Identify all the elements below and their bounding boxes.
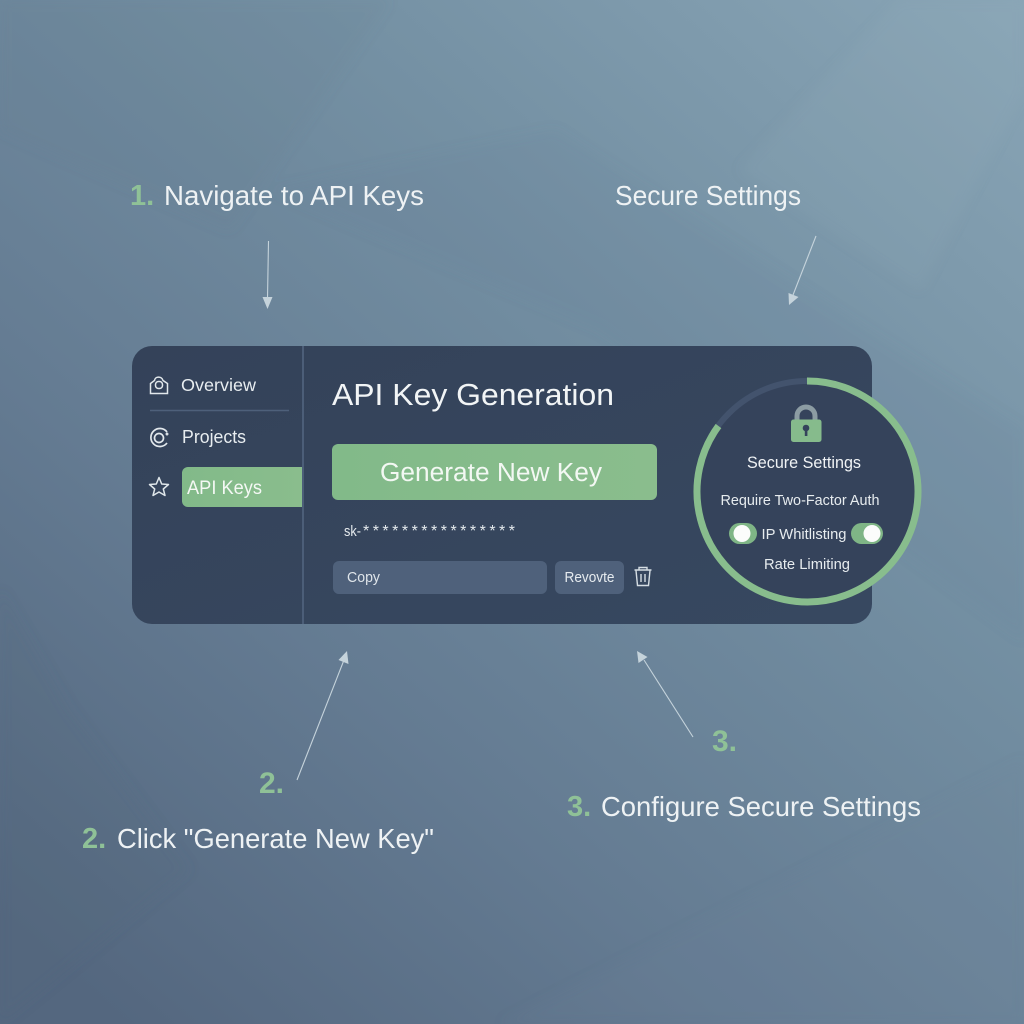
- step 2 heading: Click Generate New Key: 2.: [82, 823, 106, 855]
- step 3 heading: Configure Secure Settings: Configure Secure Settings: [601, 791, 921, 822]
- progress ring: [697, 381, 918, 602]
- button: Generate New Key: [332, 444, 657, 500]
- arrow: step 1 to sidebar: [262, 241, 272, 309]
- label: Projects: Projects: [182, 427, 246, 447]
- arrow: secure settings to circle: [788, 236, 816, 305]
- label: Rate Limiting: Rate Limiting: [764, 557, 850, 573]
- icon: padlock: [791, 407, 822, 442]
- icon: overview: [150, 377, 168, 394]
- step number: 2: 2.: [259, 767, 284, 800]
- active item: API Keys: API Keys: [187, 478, 262, 499]
- masked API key: sk-: [344, 523, 361, 540]
- step number: 3: 3.: [712, 725, 737, 758]
- button: Copy: Copy: [347, 570, 381, 586]
- label: IP Whitlisting: IP Whitlisting: [762, 526, 846, 543]
- masked API key: ****************: [363, 523, 515, 540]
- label: Secure Settings: Secure Settings: [747, 454, 861, 472]
- icon: star: [150, 478, 168, 496]
- sidebar navigation: [150, 375, 302, 507]
- step 1 heading: Navigate to API Keys: Navigate to API Keys: [164, 180, 424, 211]
- step 1 heading: Navigate to API Keys: 1.: [130, 180, 154, 212]
- step 2 heading: Click Generate New Key: Click "Generate New Key": [117, 823, 434, 854]
- arrow: step 2 to button: [297, 651, 348, 780]
- arrow: step 3 to actions: [637, 651, 693, 737]
- label: Overview: Overview: [181, 375, 256, 395]
- toggle: right: [851, 523, 883, 544]
- title: API Key Generation: API Key Generation: [332, 377, 614, 412]
- button: Copy: [333, 561, 547, 594]
- panel: secure settings circle: [696, 381, 918, 602]
- heading: Secure Settings: Secure Settings: [615, 180, 801, 211]
- button: Revovte: [555, 561, 624, 594]
- toggle: left: [729, 523, 757, 544]
- active item: API Keys: [182, 467, 302, 507]
- button: Generate New Key: Generate New Key: [380, 459, 602, 487]
- icon: trash: [634, 568, 652, 586]
- icon: projects: [151, 428, 168, 446]
- step 3 heading: Configure Secure Settings: 3.: [567, 791, 591, 823]
- button: Revovte: Revovte: [564, 570, 614, 586]
- label: Require Two-Factor Auth: Require Two-Factor Auth: [720, 493, 880, 509]
- panel: API key card: [132, 346, 918, 624]
